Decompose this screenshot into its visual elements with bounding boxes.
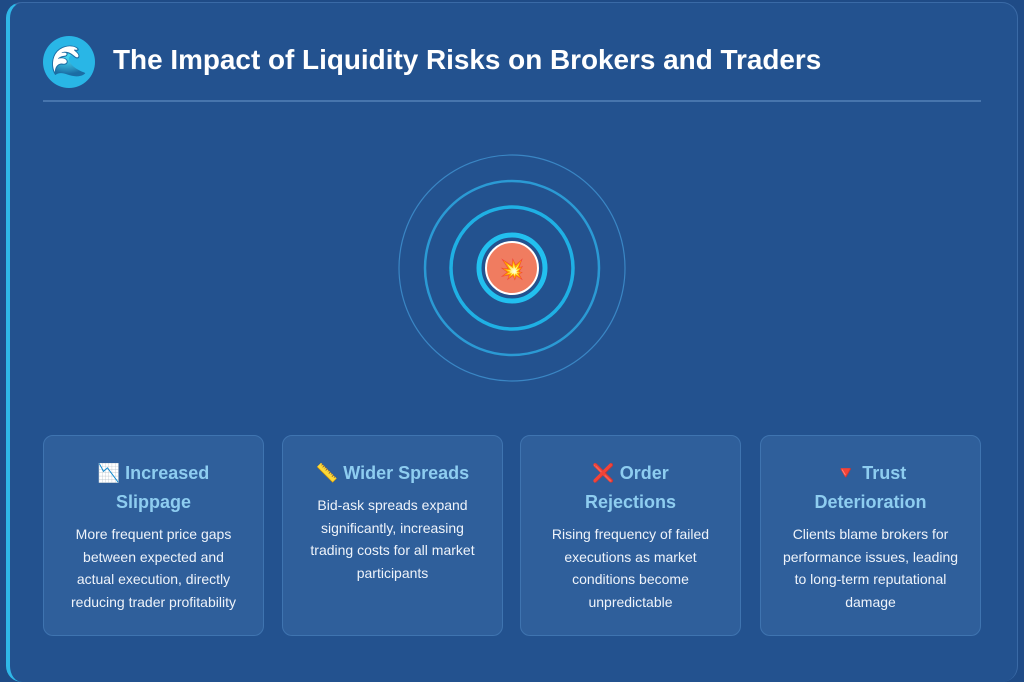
logo icon — [43, 36, 95, 88]
card: Order Rejections: ❌ Order Rejections — [585, 463, 676, 512]
card: Increased Slippage: More frequent price gaps between expected and actual execution, directly reducing trader profitability — [71, 526, 236, 610]
card: Wider Spreads: 📏 Wider Spreads — [316, 463, 469, 483]
logo icon: 🌊 — [50, 45, 88, 78]
card: Trust Deterioration — [760, 435, 981, 636]
card: Wider Spreads — [282, 435, 503, 636]
title: The Impact of Liquidity Risks on Brokers and Traders — [113, 44, 821, 75]
card: Order Rejections: Rising frequency of failed executions as market conditions become unpredictable — [552, 526, 709, 610]
card: Wider Spreads: Bid-ask spreads expand significantly, increasing trading costs for all market participants — [310, 497, 475, 580]
card: Increased Slippage — [43, 435, 264, 636]
card: Increased Slippage: 📉 Increased Slippage — [98, 463, 209, 512]
card: Order Rejections — [520, 435, 741, 636]
concentric ripple graphic: 💥 — [500, 257, 524, 281]
card: Trust Deterioration: 🔻 Trust Deterioration — [814, 463, 927, 512]
card: Trust Deterioration: Clients blame brokers for performance issues, leading to long-term reputational damage — [783, 526, 958, 610]
